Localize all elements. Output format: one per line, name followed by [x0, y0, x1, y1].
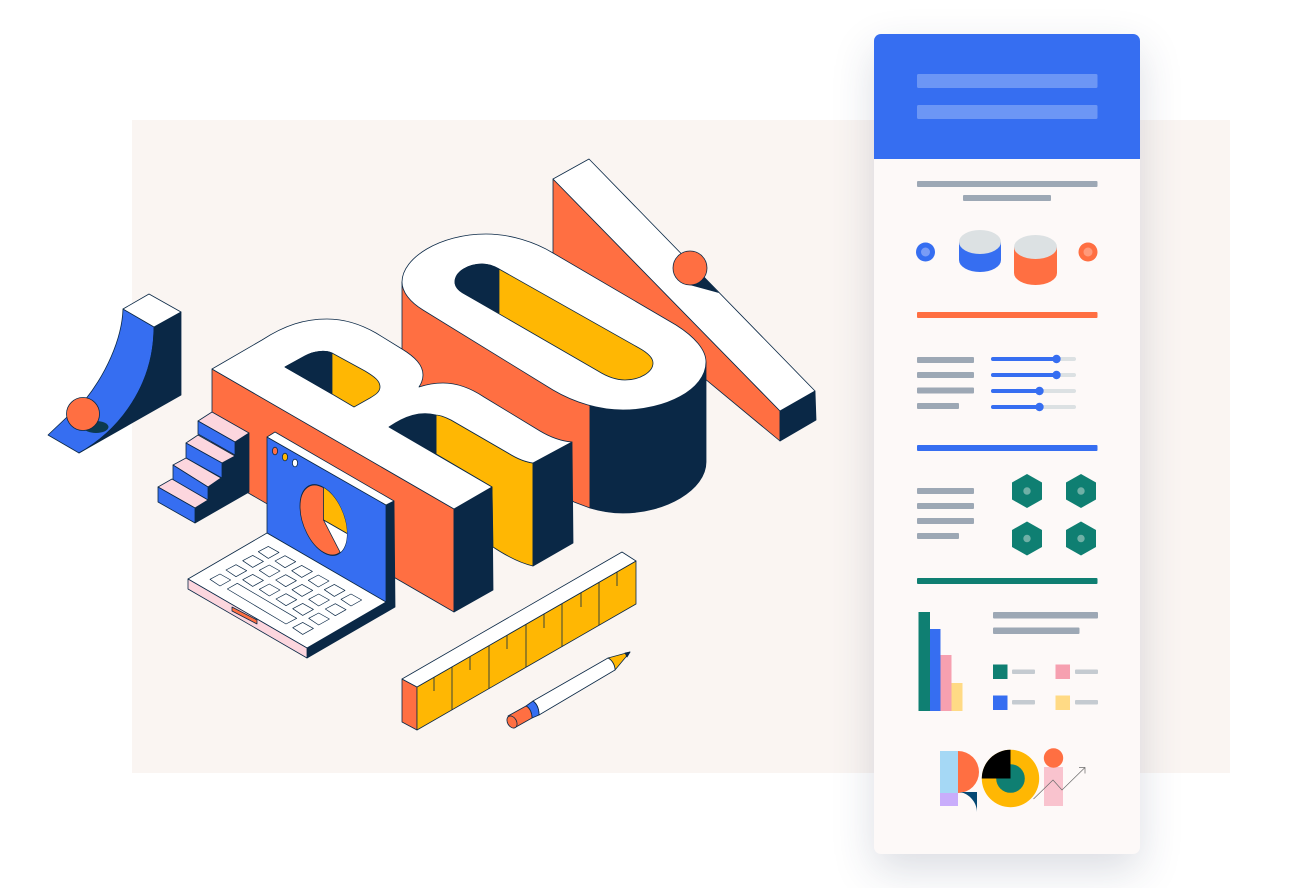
letter i — [553, 159, 816, 441]
keyboard — [188, 533, 386, 648]
letter O — [402, 234, 706, 513]
pie chart — [300, 484, 348, 556]
background panel — [132, 120, 1230, 773]
ramp with ball — [48, 294, 181, 453]
document panel — [874, 34, 1140, 854]
bar chart — [918, 612, 962, 711]
laptop — [188, 432, 395, 658]
chart legend — [993, 664, 1098, 710]
sliders — [991, 355, 1076, 411]
i dot with shadow — [673, 251, 719, 293]
chart text lines — [993, 612, 1098, 634]
window dots — [272, 447, 298, 467]
cylinders and dots row — [916, 230, 1098, 285]
pencil — [505, 652, 630, 730]
slider labels — [917, 357, 974, 409]
ruler — [402, 552, 636, 730]
intro text lines — [917, 181, 1098, 201]
laptop screen — [267, 437, 386, 602]
letter R — [212, 319, 573, 612]
hexagon icons — [1012, 474, 1096, 556]
panel header — [874, 34, 1140, 159]
text lines beside hexagons — [917, 488, 974, 539]
ROI logo — [940, 748, 1085, 812]
stairs — [158, 412, 249, 523]
orange divider — [917, 312, 1098, 318]
green divider — [917, 578, 1098, 584]
blue divider — [917, 445, 1098, 451]
